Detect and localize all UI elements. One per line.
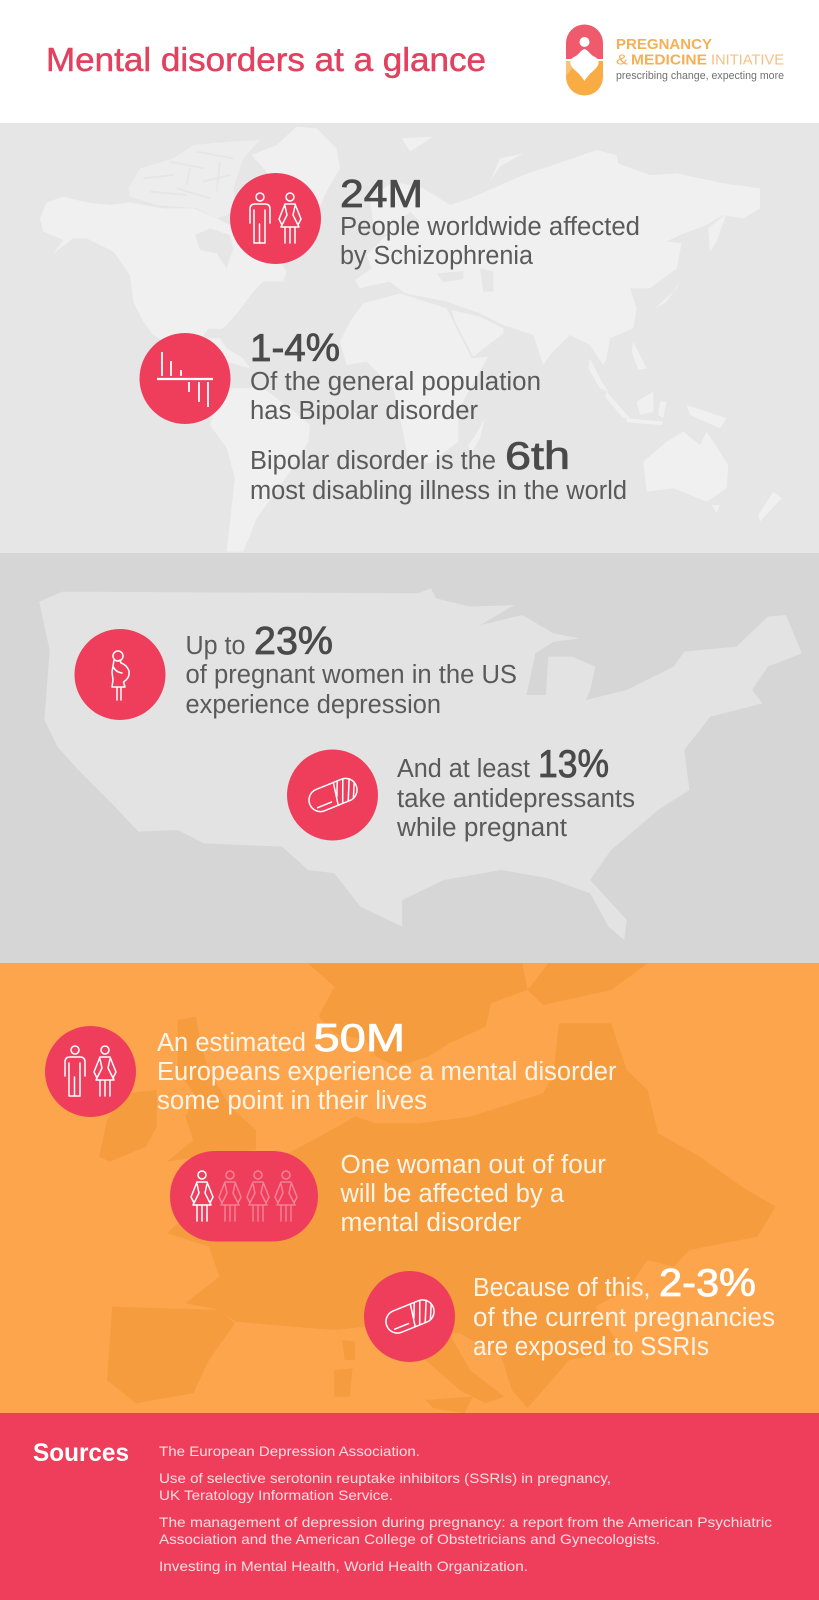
- text: source list: Use of selective serotonin reuptake inhibitors (SSRIs) in pregnancy,: [159, 1470, 611, 1486]
- text: general population: [250, 368, 541, 425]
- logo: INITIATIVE: [711, 52, 784, 68]
- title: Mental disorders at a glance: [46, 41, 486, 78]
- map of Europe: [99, 963, 776, 1413]
- figure: 24M: 24M: [340, 173, 423, 216]
- heading: sources: Sources: [33, 1439, 129, 1467]
- text: 50M Europeans: some point in their lives: [157, 1087, 427, 1115]
- logo: prescribing change, expecting more: [616, 70, 784, 82]
- text: 23% of pregnant women: experience depression: [186, 691, 441, 719]
- text: 6th most disabling illness: Bipolar disorder is the: [250, 447, 496, 475]
- statistic: bipolar disorder: [140, 327, 627, 505]
- icon: man and woman: [45, 1026, 136, 1117]
- text: general population: Of the general population: [250, 368, 541, 396]
- icon: four women in pill: [170, 1151, 318, 1242]
- logo: MEDICINE: [631, 52, 707, 68]
- text: source list: The management of depression during pregnancy: a report from the American Psychiatric: [159, 1514, 772, 1530]
- statistic: 50M Europeans: [45, 1017, 617, 1117]
- statistic: 13% antidepressants: [287, 743, 635, 842]
- panel: header: [0, 0, 819, 123]
- statistic: one woman out of four: [170, 1151, 607, 1242]
- text: 2-3% of current pregnancies: are exposed to SSRIs: [473, 1333, 709, 1361]
- logo: [566, 24, 784, 96]
- icon: capsule: [287, 750, 378, 840]
- text: 23% of pregnant women: 23%: [254, 620, 333, 663]
- text: source list: [159, 1443, 772, 1574]
- text: 23% of pregnant women: of pregnant women in the US: [186, 661, 517, 689]
- text: source list: Investing in Mental Health, World Health Organization.: [159, 1558, 528, 1574]
- text: 2-3% of current pregnancies: 2-3%: [659, 1262, 756, 1305]
- text: source list: UK Teratology Information Service.: [159, 1487, 393, 1503]
- logo: &: [616, 52, 628, 68]
- text: 13% take antidepressants: [396, 743, 635, 842]
- text: general population: has Bipolar disorder: [250, 397, 478, 425]
- panel: Europe statistics: [0, 963, 819, 1413]
- text: 2-3% of current pregnancies: Because of this,: [473, 1274, 650, 1302]
- text: 2-3% of current pregnancies: [473, 1262, 775, 1361]
- text: 2-3% of current pregnancies: of the current pregnancies: [473, 1304, 775, 1332]
- text: 50M Europeans: 50M: [314, 1017, 405, 1060]
- text: 6th most disabling illness: 6th: [505, 435, 570, 478]
- text: one woman out of four: mental disorder: [340, 1209, 522, 1237]
- map of the United States: [39, 588, 802, 940]
- text: schizophrenia: by Schizophrenia: [340, 242, 534, 270]
- icon: man and woman: [230, 173, 321, 264]
- text: 13% take antidepressants: And at least: [397, 755, 530, 783]
- text: 13% take antidepressants: 13%: [538, 743, 609, 786]
- text: 13% take antidepressants: while pregnant: [396, 814, 567, 842]
- text: source list: Association and the American College of Obstetricians and Gynecologists.: [159, 1531, 660, 1547]
- text: 50M Europeans: Europeans experience a mental disorder: [157, 1058, 617, 1086]
- statistic: 2-3% SSRI exposure: [364, 1262, 775, 1362]
- text: 23% of pregnant women: Up to: [186, 632, 246, 660]
- text: 50M Europeans: [157, 1017, 617, 1115]
- figure: 1-4%: 1-4%: [250, 327, 340, 370]
- panel: sources: [0, 1413, 819, 1600]
- icon: pregnant woman: [74, 629, 166, 720]
- statistic: 24M schizophrenia: [230, 173, 640, 270]
- text: 6th most disabling illness: most disabling illness in the world: [250, 477, 627, 505]
- icon: capsule: [364, 1271, 455, 1362]
- world map: [40, 127, 782, 552]
- text: 13% take antidepressants: take antidepressants: [397, 785, 635, 813]
- text: schizophrenia: [340, 213, 640, 270]
- text: one woman out of four: One woman out of four: [340, 1151, 607, 1179]
- statistic: 23% pregnant women: [74, 620, 517, 720]
- logo: PREGNANCY: [616, 36, 712, 53]
- text: 50M Europeans: An estimated: [157, 1029, 306, 1057]
- text: 6th most disabling illness: [250, 435, 627, 505]
- text: 23% of pregnant women: [186, 620, 517, 719]
- panel: United States statistics: [0, 553, 819, 963]
- panel: worldwide statistics: [0, 123, 819, 553]
- text: source list: The European Depression Association.: [159, 1443, 420, 1459]
- text: schizophrenia: People worldwide affected: [340, 213, 640, 241]
- text: one woman out of four: [340, 1151, 607, 1237]
- icon: bipolar bar chart: [140, 333, 230, 424]
- text: one woman out of four: will be affected by a: [340, 1180, 565, 1208]
